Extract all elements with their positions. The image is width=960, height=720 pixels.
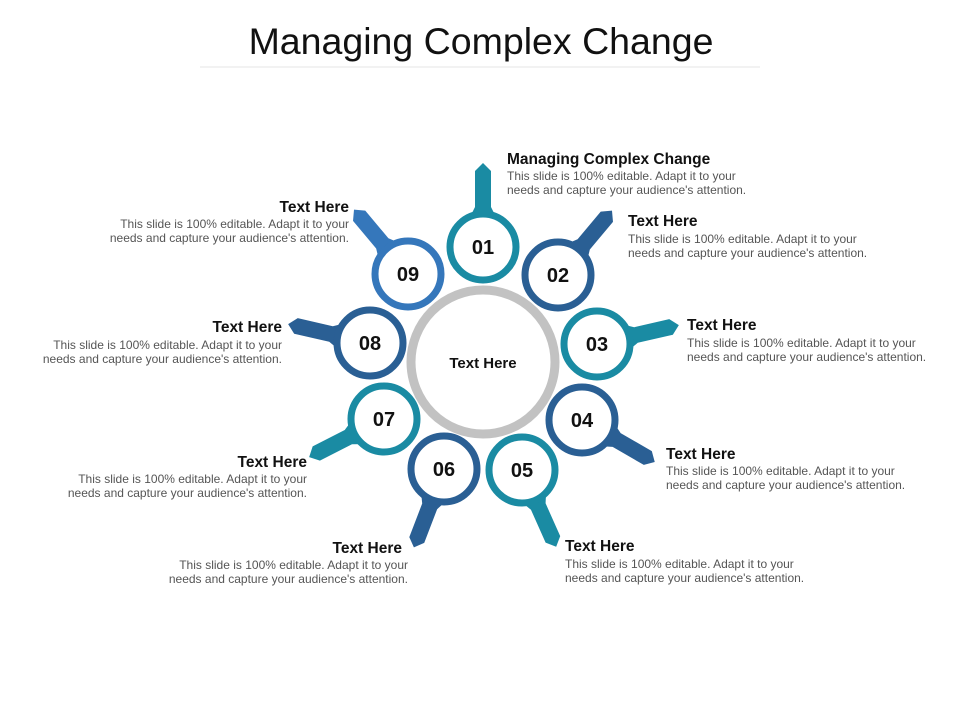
text 09: Text Here [280, 199, 349, 216]
text 07: This slide is 100% editable. Adapt it to your [78, 472, 307, 486]
text 05: This slide is 100% editable. Adapt it to your [565, 557, 794, 571]
text 05: Text Here [565, 538, 635, 555]
node 08 [285, 310, 403, 376]
text 05 [565, 538, 804, 585]
node 03 [564, 311, 682, 377]
text 02: Text Here [628, 213, 698, 230]
text 04: This slide is 100% editable. Adapt it to your [666, 464, 895, 478]
node 05: 05 [511, 460, 533, 482]
text 03 [687, 317, 926, 364]
text 09: This slide is 100% editable. Adapt it to your [120, 217, 349, 231]
node 09: 09 [397, 264, 419, 286]
text 02 [628, 213, 867, 260]
text 03: This slide is 100% editable. Adapt it to your [687, 336, 916, 350]
node 01 [450, 163, 516, 280]
text 02: This slide is 100% editable. Adapt it to your [628, 232, 857, 246]
node 06 [401, 436, 477, 552]
text 07: needs and capture your audience's attention. [68, 486, 307, 500]
text 04 [666, 446, 905, 492]
text 01: Managing Complex Change [507, 151, 711, 168]
text 02: needs and capture your audience's attention. [628, 246, 867, 260]
text 08: needs and capture your audience's attention. [43, 352, 282, 366]
node 07 [303, 386, 417, 470]
node 04 [549, 387, 662, 474]
text 08 [43, 319, 282, 366]
text 03: Text Here [687, 317, 757, 334]
node 07: 07 [373, 409, 395, 431]
text 07: Text Here [238, 454, 307, 471]
title: Managing Complex Change [249, 20, 713, 62]
node 01: 01 [472, 237, 494, 259]
text 04: needs and capture your audience's attention. [666, 478, 905, 492]
text 09: needs and capture your audience's attention. [110, 231, 349, 245]
text 08: Text Here [212, 319, 282, 336]
center circle [411, 290, 555, 434]
text 01 [507, 151, 746, 197]
node 05 [489, 437, 569, 552]
text 05: needs and capture your audience's attention. [565, 571, 804, 585]
node 03: 03 [586, 334, 608, 356]
node 09 [343, 201, 441, 307]
text 03: needs and capture your audience's attention. [687, 350, 926, 364]
text 04: Text Here [666, 446, 736, 463]
node 02 [525, 202, 623, 308]
node 06: 06 [433, 459, 455, 481]
text 09 [110, 199, 349, 245]
text 07 [68, 454, 307, 500]
text 06: This slide is 100% editable. Adapt it to your [179, 558, 408, 572]
node 08: 08 [359, 333, 381, 355]
text 01: This slide is 100% editable. Adapt it to your [507, 169, 736, 183]
text 06: Text Here [332, 540, 402, 557]
node 04: 04 [571, 410, 594, 432]
center circle: Text Here [449, 355, 517, 372]
node 02: 02 [547, 265, 569, 287]
text 08: This slide is 100% editable. Adapt it to your [53, 338, 282, 352]
text 06: needs and capture your audience's attention. [169, 572, 408, 586]
text 06 [169, 540, 408, 586]
text 01: needs and capture your audience's attention. [507, 183, 746, 197]
